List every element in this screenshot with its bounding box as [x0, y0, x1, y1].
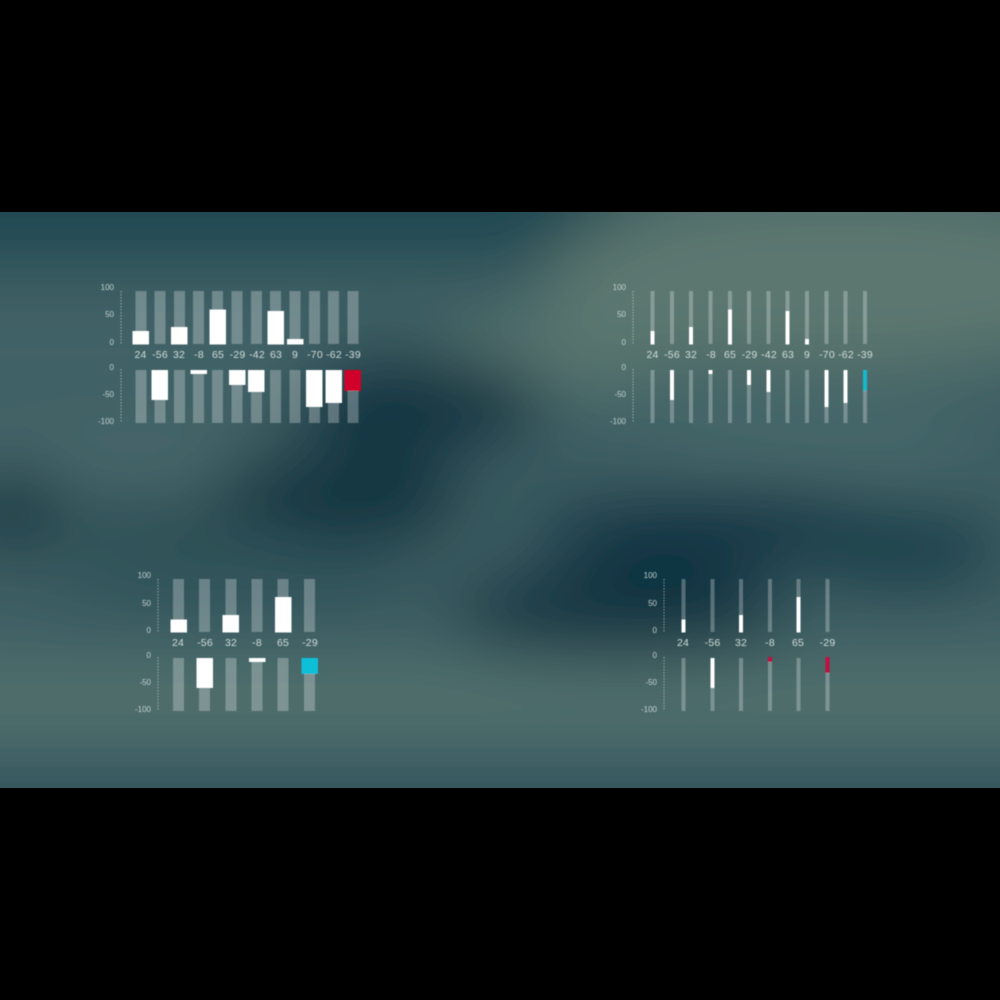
value labels	[677, 637, 835, 649]
value labels: -42	[761, 349, 777, 361]
y axis: upper and lower scales	[98, 283, 121, 426]
value labels: 32	[225, 637, 237, 649]
value labels: 32	[685, 349, 697, 361]
value labels: 65	[277, 637, 289, 649]
y axis: upper and lower scales: 0	[622, 363, 627, 372]
y axis: upper and lower scales	[135, 571, 158, 714]
white value bars	[650, 310, 848, 407]
y axis: upper and lower scales: -100	[98, 417, 115, 426]
y axis: upper and lower scales: 50	[648, 599, 658, 608]
value labels: -8	[706, 349, 716, 361]
red highlighted bars	[768, 657, 830, 673]
value labels: -62	[838, 349, 854, 361]
background tracks	[136, 291, 358, 423]
value labels: -70	[307, 349, 323, 361]
y axis: upper and lower scales: -50	[102, 390, 115, 399]
y axis: upper and lower scales: -100	[135, 705, 152, 714]
value labels: -39	[345, 349, 361, 361]
value labels: 65	[792, 637, 804, 649]
value labels: 9	[804, 349, 810, 361]
value labels: -42	[249, 349, 265, 361]
white value bars	[132, 310, 342, 407]
chart: thin bars, 12 values, cyan highlight	[610, 283, 873, 426]
background tracks	[173, 579, 315, 711]
background tracks	[650, 291, 867, 423]
white value bars	[682, 597, 800, 688]
value labels: 24	[677, 637, 689, 649]
chart: thin bars, 6 values, red highlights	[641, 571, 835, 714]
value labels: 24	[646, 349, 659, 361]
value labels: 9	[292, 349, 298, 361]
y axis: upper and lower scales: -100	[641, 705, 658, 714]
y axis: upper and lower scales: 0	[653, 651, 658, 660]
chart: wide bars, 6 values, cyan highlight	[135, 571, 318, 714]
value labels: -29	[230, 349, 245, 361]
value labels: -8	[765, 637, 775, 649]
value labels	[134, 349, 361, 361]
cyan highlighted bar	[302, 658, 318, 674]
value labels: -56	[705, 637, 720, 649]
value labels: 32	[735, 637, 747, 649]
background tracks	[682, 579, 830, 711]
y axis: upper and lower scales: 0	[147, 651, 152, 660]
y axis: upper and lower scales: 100	[138, 571, 152, 580]
value labels: -39	[857, 349, 873, 361]
y axis: upper and lower scales	[641, 571, 664, 714]
red highlighted bar	[344, 370, 361, 391]
y axis: upper and lower scales: 50	[142, 599, 152, 608]
value labels: 65	[724, 349, 736, 361]
y axis: upper and lower scales: -50	[139, 678, 152, 687]
value labels: -29	[302, 637, 318, 649]
y axis: upper and lower scales	[610, 283, 633, 426]
value labels: 65	[212, 349, 224, 361]
y axis: upper and lower scales: 100	[613, 283, 627, 292]
y axis: upper and lower scales: 100	[101, 283, 115, 292]
white value bars	[170, 597, 292, 688]
value labels: 63	[782, 349, 794, 361]
cyan highlighted bar	[863, 370, 867, 391]
y axis: upper and lower scales: 0	[653, 626, 658, 635]
value labels: 63	[270, 349, 282, 361]
value labels	[646, 349, 873, 361]
value labels: -62	[326, 349, 342, 361]
value labels: -29	[742, 349, 757, 361]
y axis: upper and lower scales: 50	[617, 310, 627, 319]
value labels: 32	[173, 349, 185, 361]
y axis: upper and lower scales: 0	[622, 338, 627, 347]
value labels: -56	[152, 349, 168, 361]
chart: wide bars, 12 values, red highlight	[98, 283, 361, 426]
value labels: -70	[819, 349, 835, 361]
y axis: upper and lower scales: -50	[645, 678, 658, 687]
value labels: 24	[134, 349, 147, 361]
value labels: -8	[252, 637, 262, 649]
y axis: upper and lower scales: -50	[614, 390, 627, 399]
y axis: upper and lower scales: 0	[110, 338, 115, 347]
y axis: upper and lower scales: 100	[644, 571, 658, 580]
blurred teal background	[0, 212, 1000, 788]
value labels: -56	[664, 349, 680, 361]
value labels: -56	[197, 637, 213, 649]
y axis: upper and lower scales: 50	[105, 310, 115, 319]
y axis: upper and lower scales: -100	[610, 417, 627, 426]
value labels	[172, 637, 318, 649]
value labels: -29	[820, 637, 835, 649]
y axis: upper and lower scales: 0	[147, 626, 152, 635]
value labels: 24	[172, 637, 184, 649]
y axis: upper and lower scales: 0	[110, 363, 115, 372]
value labels: -8	[194, 349, 204, 361]
